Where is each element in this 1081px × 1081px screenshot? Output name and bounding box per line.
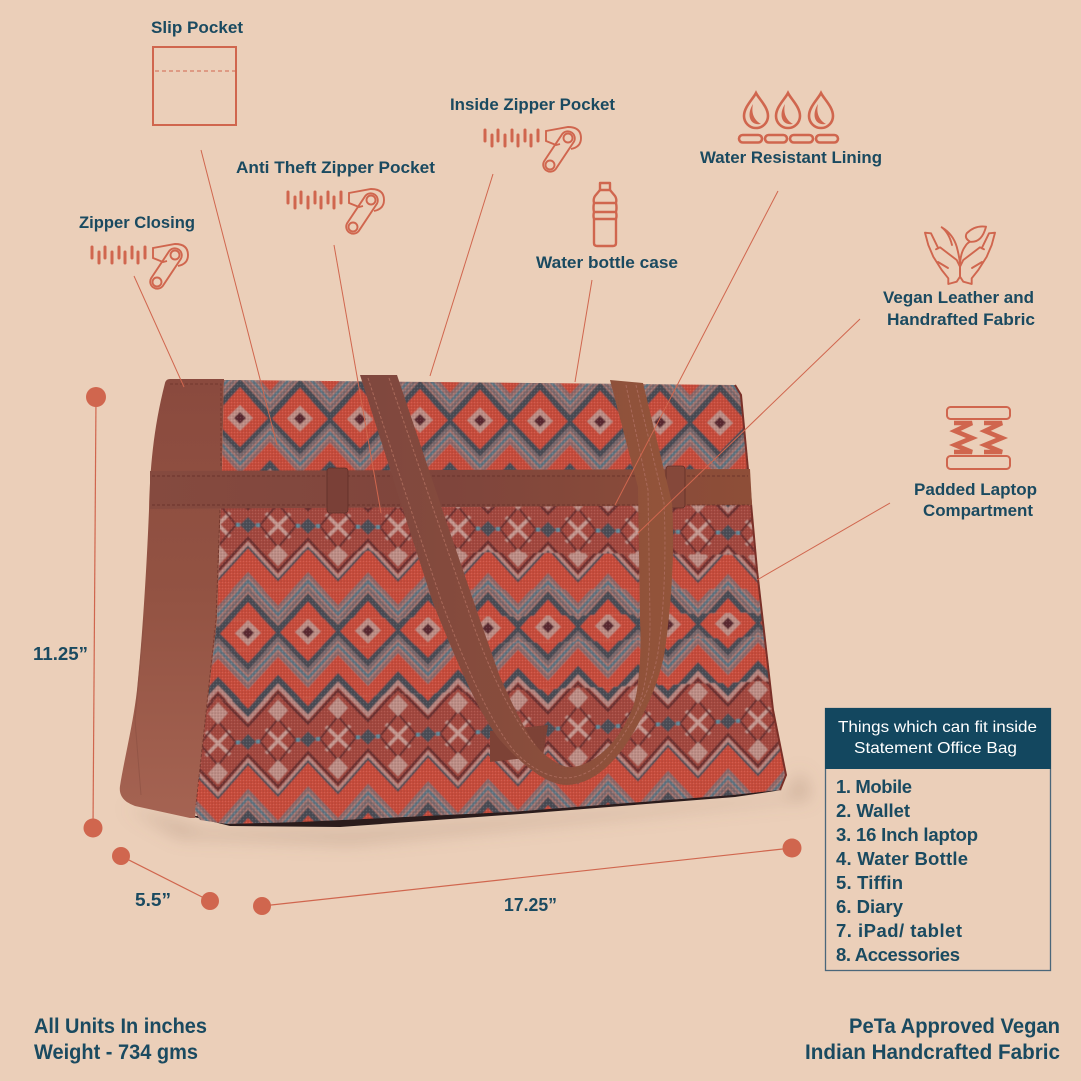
heading: inside zipper pocket: Inside Zipper Pocket [450, 95, 615, 114]
fabric edge [735, 385, 786, 790]
heading: vegan leather [883, 288, 1035, 329]
icon: slip pocket [153, 47, 236, 125]
bag photo [120, 370, 810, 842]
heading: water bottle case: Water bottle case [536, 253, 678, 272]
panel header: Things which can fit inside [838, 719, 1037, 736]
dimension: depth: 5.5” [135, 890, 171, 910]
item list: 5. Tiffin [836, 872, 903, 893]
dimension: height [33, 387, 106, 838]
bag shadow [125, 770, 810, 842]
heading: slip pocket: Slip Pocket [151, 18, 243, 37]
dimension: width: 17.25” [504, 895, 557, 915]
item list: 4. Water Bottle [836, 848, 968, 869]
item list: 2. Wallet [836, 800, 910, 821]
footer: vegan and handcrafted: Indian Handcrafted Fabric [805, 1041, 1060, 1064]
icon: padding springs [947, 407, 1010, 469]
icon: water bottle [594, 183, 616, 246]
icon: hands with leaf [925, 226, 995, 284]
heading: padded laptop compartment: Compartment [923, 501, 1033, 520]
item list: 6. Diary [836, 896, 904, 917]
item list [836, 776, 978, 965]
footer: vegan and handcrafted [805, 1015, 1060, 1064]
item list: 1. Mobile [836, 776, 912, 797]
heading: water resistant lining: Water Resistant Lining [700, 148, 882, 167]
footer: units and weight: All Units In inches [34, 1015, 207, 1038]
dimension: height: 11.25” [33, 644, 88, 664]
panel header [825, 708, 1051, 769]
belt loop left [327, 468, 348, 513]
heading: vegan leather: Handrafted Fabric [887, 310, 1035, 329]
woven fabric panel [190, 370, 800, 830]
bottom patch [490, 725, 548, 762]
item list: 3. 16 Inch laptop [836, 824, 978, 845]
callout lines [134, 150, 890, 580]
side panel fold [135, 620, 144, 795]
heading: vegan leather: Vegan Leather and [883, 288, 1034, 307]
heading: anti theft zipper pocket: Anti Theft Zipper Pocket [236, 158, 435, 177]
shoulder straps [360, 375, 673, 785]
heading: zipper closing: Zipper Closing [79, 213, 195, 232]
item list: 8. Accessories [836, 944, 960, 965]
icon: closing zipper [92, 244, 188, 289]
dimension: width [253, 838, 802, 915]
panel: things which fit inside [825, 708, 1051, 970]
belt [150, 466, 752, 513]
side panel stitching [170, 384, 221, 805]
icon: water drops [739, 93, 838, 142]
footer: units and weight: Weight - 734 gms [34, 1041, 198, 1064]
bag base shadow edge [190, 790, 782, 827]
footer: vegan and handcrafted: PeTa Approved Vegan [849, 1015, 1060, 1038]
icon: anti theft zipper [288, 189, 384, 234]
dimension: depth [112, 847, 219, 910]
heading: padded laptop compartment [914, 480, 1037, 520]
footer: units and weight [34, 1015, 207, 1064]
panel header: Statement Office Bag [854, 740, 1017, 757]
icon: inside zipper [485, 127, 581, 172]
belt loop right [666, 466, 685, 508]
heading: padded laptop compartment: Padded Laptop [914, 480, 1037, 499]
item list: 7. iPad/ tablet [836, 920, 962, 941]
leather side panel [120, 379, 224, 818]
